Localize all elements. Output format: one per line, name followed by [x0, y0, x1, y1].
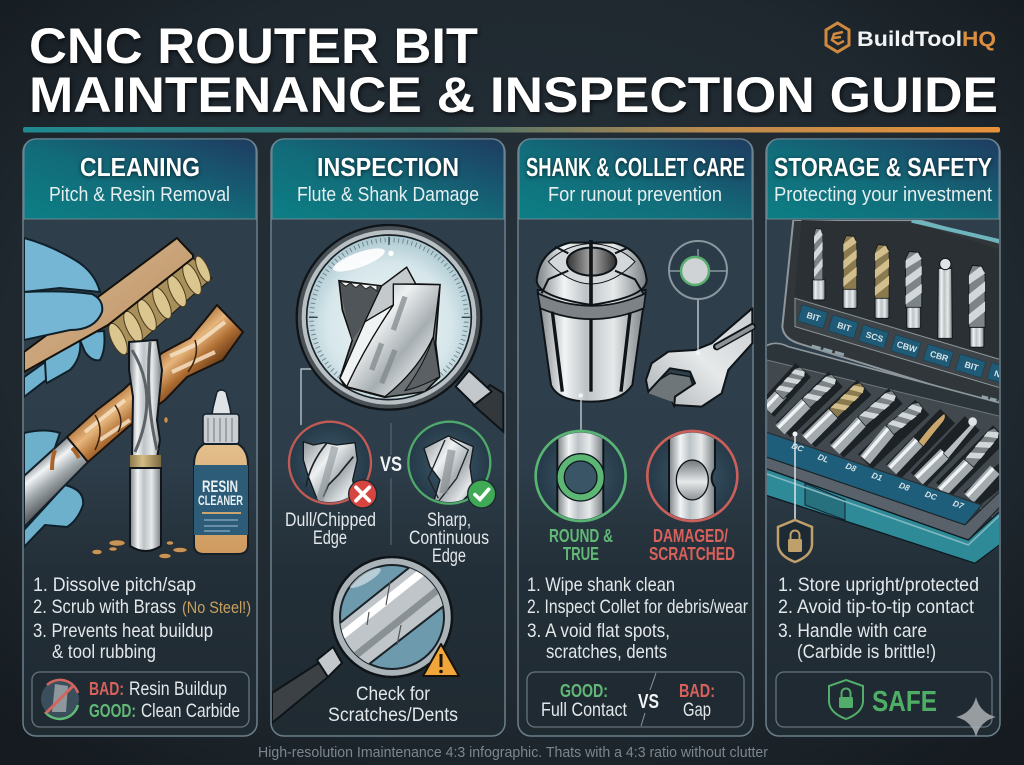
label: round and true — [549, 526, 613, 564]
case lid — [782, 220, 1002, 407]
callout: safe: SAFE — [872, 686, 937, 718]
title — [29, 18, 998, 123]
panel header: shank and collet care: SHANK & COLLET CARE — [526, 152, 745, 182]
logo: BuildToolHQ: BuildTool — [857, 28, 962, 51]
callout: bad vs good cleaning: Resin Buildup — [129, 678, 227, 700]
steps: cleaning: 1. Dissolve pitch/sap — [33, 574, 196, 596]
steps: cleaning — [33, 574, 251, 663]
callout: full contact vs gap — [527, 672, 744, 727]
icon: collet and wrench — [537, 240, 752, 407]
icon: runout target — [669, 241, 727, 356]
vs label: VS — [380, 453, 402, 476]
steps: cleaning: (No Steel!) — [182, 598, 251, 617]
label: sharp edge — [409, 509, 489, 567]
label: check for scratches — [328, 683, 458, 726]
tray bits flutes — [775, 365, 807, 399]
label: sharp edge: Continuous — [409, 527, 489, 549]
callout: bad vs good cleaning: GOOD: — [89, 700, 136, 721]
steps: storage and safety: 1. Store upright/protected — [778, 574, 979, 596]
callout: safe — [776, 672, 992, 727]
tray bits shanks — [767, 393, 995, 498]
callout: full contact vs gap: Full Contact — [541, 699, 627, 721]
steps: shank and collet: 1. Wipe shank clean — [527, 574, 675, 596]
illustration: bit storage case: CBW — [896, 339, 919, 355]
label: round and true: ROUND & — [549, 526, 613, 546]
panel: storage and safety — [762, 139, 1024, 736]
icon: small magnifying glass on scratched shank — [272, 551, 463, 723]
label: dull edge — [285, 509, 376, 549]
panel: cleaning — [23, 139, 257, 736]
illustration: bit storage case: D1 — [870, 470, 884, 483]
bottle: resin cleaner: CLEANER — [198, 493, 243, 508]
callout: bad vs good cleaning — [32, 672, 249, 727]
icon: warning triangle — [423, 644, 459, 676]
illustration: bit storage case: DC — [924, 489, 939, 503]
shelf — [795, 298, 1002, 388]
steps: storage and safety: 2. Avoid tip-to-tip contact — [778, 596, 975, 618]
straight bit — [129, 340, 162, 551]
gloved fingers over handle — [24, 238, 102, 340]
steps: shank and collet: scratches, dents — [546, 641, 667, 663]
illustration: bit storage case: BIT — [963, 359, 980, 373]
title: CNC ROUTER BIT — [29, 18, 478, 74]
illustration: brush, resin covered bit and cleaner bottle — [24, 238, 248, 558]
callout: bad vs good cleaning: Clean Carbide — [141, 700, 240, 722]
steps: storage and safety: 3. Handle with care — [778, 620, 927, 642]
callout: full contact vs gap: Gap — [683, 699, 711, 721]
upright bits — [812, 258, 984, 347]
storage labels — [797, 305, 1011, 384]
label: check for scratches: Check for — [356, 683, 430, 705]
panel header: inspection: INSPECTION — [317, 152, 459, 182]
wrench — [646, 308, 752, 407]
icon: green shield lock — [829, 680, 863, 719]
label: damaged or scratched — [649, 526, 735, 564]
panel header: cleaning: CLEANING — [80, 152, 200, 182]
tray slots — [767, 370, 1024, 500]
illustration: bit storage case: DC — [790, 440, 806, 454]
panel header: storage and safety — [767, 139, 999, 219]
icon: large magnifying glass with chipped bit — [297, 225, 503, 432]
illustration: bit storage case: D8 — [898, 480, 911, 493]
callout: full contact vs gap: GOOD: — [560, 680, 608, 701]
panel header: shank and collet care: For runout prevention — [548, 184, 722, 206]
panel: shank and collet care — [518, 139, 753, 736]
brush bristles — [105, 254, 213, 357]
panel header: cleaning: Pitch & Resin Removal — [49, 184, 230, 206]
label: damaged or scratched: SCRATCHED — [649, 544, 735, 564]
illustration: bit storage case: D7 — [952, 498, 965, 511]
tray rim and foam — [762, 343, 1002, 560]
dirty bit — [24, 305, 243, 527]
callout: full contact vs gap: VS — [638, 691, 659, 713]
logo: BuildToolHQ — [826, 23, 996, 52]
brush handle — [24, 238, 193, 372]
steps: shank and collet: 2. Inspect Collet for debris/wear — [527, 596, 748, 618]
label: check for scratches: Scratches/Dents — [328, 704, 458, 726]
title: MAINTENANCE & INSPECTION GUIDE — [29, 67, 998, 123]
illustration: bit storage case: D8 — [844, 461, 858, 474]
icon: gold lock shield — [778, 432, 812, 562]
label: sharp edge: Sharp, — [427, 509, 471, 531]
illustration: bit storage case: DL — [816, 452, 830, 465]
label: damaged or scratched: DAMAGED/ — [653, 526, 728, 546]
logo: BuildToolHQ: HQ — [962, 28, 996, 51]
comparison circles: round vs damaged shank — [536, 430, 737, 523]
label strip — [765, 432, 982, 525]
steps: shank and collet: 3. A void flat spots, — [527, 620, 670, 642]
illustration: bit storage case: BIT — [805, 310, 822, 324]
caption: High-resolution Imaintenance 4:3 infographic. Thats with a 4:3 ratio without clutter — [258, 745, 768, 761]
panel: inspection — [271, 139, 505, 736]
bottle: resin cleaner: RESIN — [202, 477, 238, 496]
callout: full contact vs gap: BAD: — [679, 680, 715, 701]
illustration: bit storage case: BIT — [836, 320, 853, 334]
steps: shank and collet — [527, 574, 748, 663]
label: dull edge: Dull/Chipped — [285, 509, 376, 531]
steps: storage and safety — [778, 574, 979, 663]
label: sharp edge: Edge — [432, 545, 466, 567]
illustration: bit storage case — [767, 220, 999, 564]
label: dull edge: Edge — [313, 527, 347, 549]
panel header: inspection: Flute & Shank Damage — [297, 184, 479, 206]
illustration: bit storage case: N — [993, 368, 1002, 379]
steps: cleaning: 3. Prevents heat buildup — [33, 620, 213, 642]
gloved hand lower — [24, 430, 83, 547]
collet — [537, 240, 647, 402]
connector line — [301, 369, 317, 425]
icon: sparkle watermark — [956, 697, 996, 737]
icon: prohibited resin bit — [41, 680, 79, 719]
steps: cleaning: 2. Scrub with Brass — [33, 596, 176, 618]
steps: storage and safety: (Carbide is brittle!) — [797, 641, 936, 663]
illustration: bit storage case: CBR — [929, 349, 950, 364]
bottle: resin cleaner — [194, 390, 248, 554]
drip and debris — [92, 417, 187, 558]
panel header: storage and safety: Protecting your investment — [774, 184, 992, 206]
callout: bad vs good cleaning: BAD: — [89, 678, 124, 699]
tray body — [765, 468, 1002, 563]
label: round and true: TRUE — [563, 544, 599, 564]
illustration: bit storage case: SCS — [865, 329, 885, 344]
panel header: cleaning — [24, 139, 256, 219]
gloved fingers under handle — [24, 331, 104, 397]
panel header: inspection — [272, 139, 504, 219]
comparison circles: dull vs sharp — [289, 422, 496, 508]
steps: cleaning: & tool rubbing — [52, 641, 156, 663]
panel header: shank and collet care — [519, 139, 752, 219]
